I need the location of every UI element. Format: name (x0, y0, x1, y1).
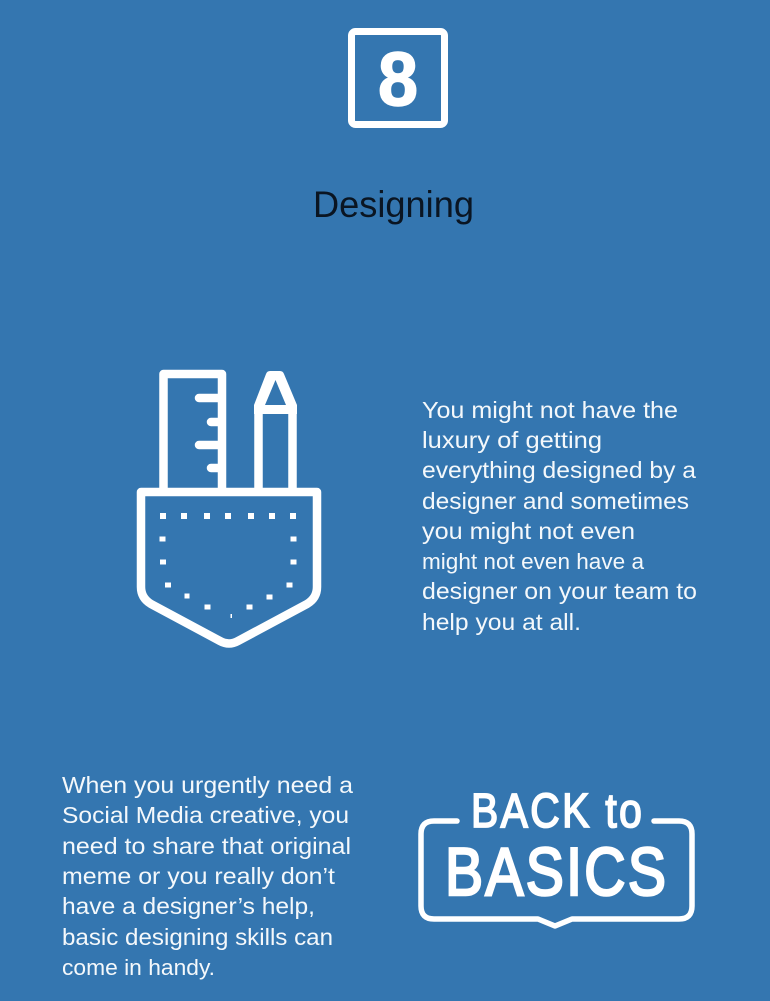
text block: left paragraph: have a designer’s help, (62, 893, 315, 919)
icon: number 8 badge: 8 (378, 38, 418, 122)
text block: right paragraph: everything designed by a (422, 457, 696, 483)
text block: left paragraph: When you urgently need a (62, 772, 353, 798)
text block: right paragraph: designer on your team to (422, 578, 697, 604)
icon: number 8 badge (352, 32, 444, 124)
text block: left paragraph: Social Media creative, you (62, 802, 349, 828)
text block: right paragraph: designer and sometimes (422, 488, 689, 514)
text block: right paragraph (422, 397, 697, 635)
logo text: BACK to: BACK to (471, 785, 642, 838)
icon: pencil (254, 371, 297, 489)
text block: right paragraph: help you at all. (422, 609, 581, 635)
text block: left paragraph: need to share that original (62, 833, 351, 859)
icon: pocket with ruler and pencil (141, 371, 317, 644)
icon: pocket outline (141, 492, 317, 644)
text block: left paragraph: basic designing skills can (62, 924, 333, 950)
logo text: BASICS: BASICS (445, 834, 666, 910)
text block: right paragraph: luxury of getting (422, 427, 602, 453)
logo: Back to Basics (421, 785, 692, 926)
text block: right paragraph: You might not have the (422, 397, 678, 423)
text block: right paragraph: might not even have a (422, 549, 645, 574)
text block: left paragraph (62, 772, 353, 980)
title: Designing (313, 184, 474, 225)
text block: left paragraph: meme or you really don’t (62, 863, 336, 889)
text block: left paragraph: come in handy. (62, 955, 215, 980)
icon: pocket stitching (160, 513, 296, 618)
text block: right paragraph: you might not even (422, 518, 635, 544)
logo frame (421, 821, 692, 926)
icon: ruler (164, 374, 222, 489)
